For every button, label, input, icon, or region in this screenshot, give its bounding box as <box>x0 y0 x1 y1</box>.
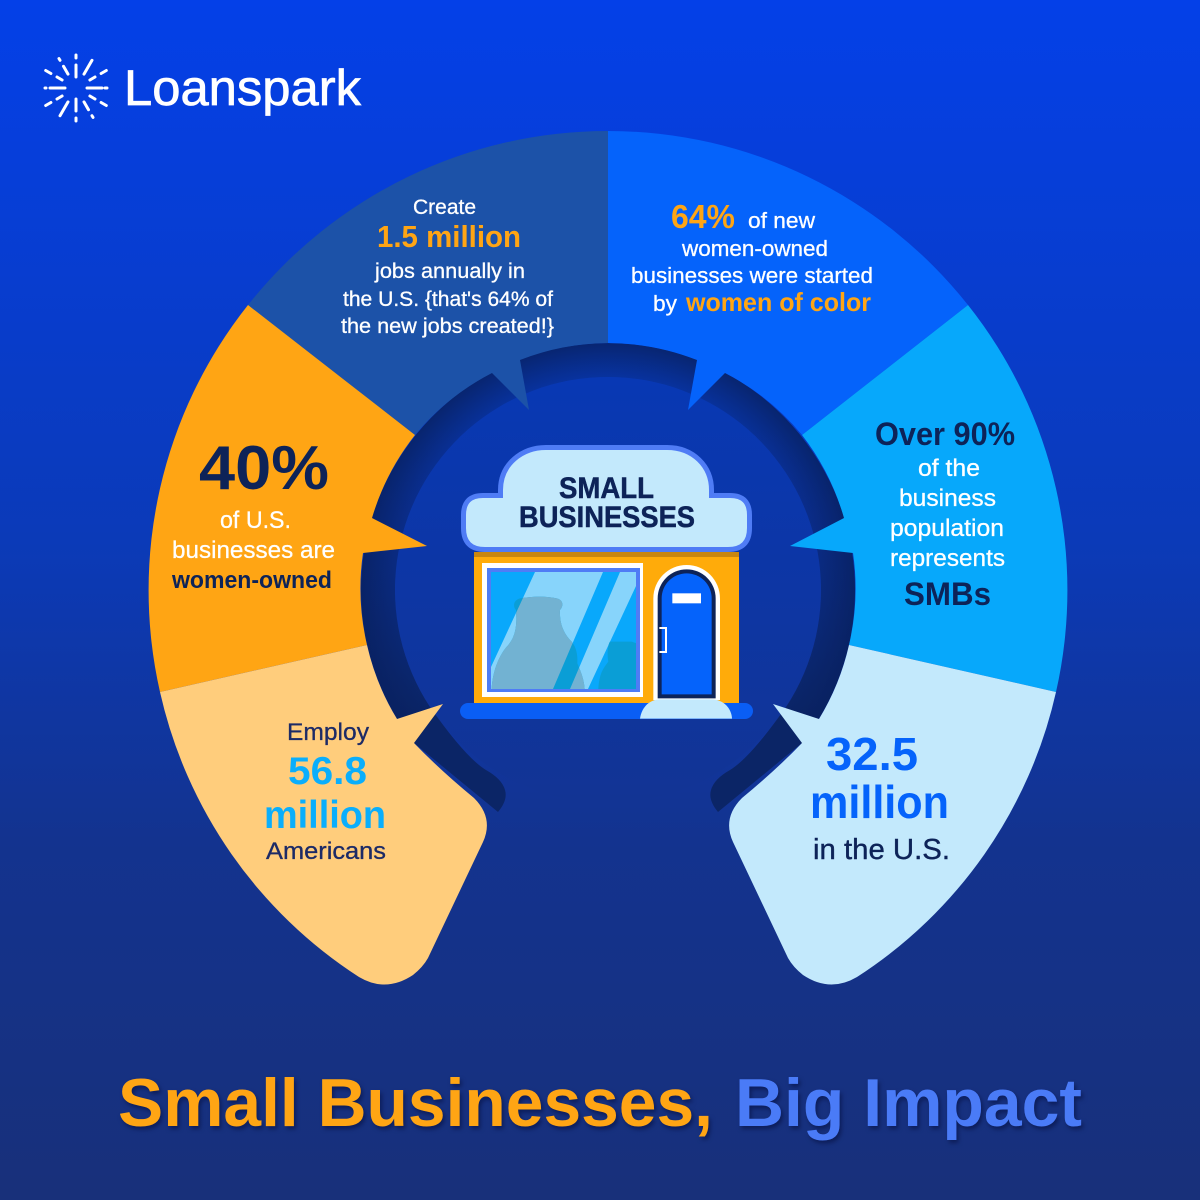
central disk <box>395 377 821 803</box>
panel: over 90% SMBs <box>790 305 1067 692</box>
panel: 64% women of color <box>608 131 968 435</box>
wall <box>474 552 739 703</box>
panel: 32.5 million in the U.S.: million <box>810 776 949 828</box>
panel: 64% women of color: of new <box>748 208 815 233</box>
panel: over 90% SMBs: Over 90% <box>875 416 1015 452</box>
title <box>118 1065 1082 1141</box>
door <box>653 565 720 700</box>
panel: 56.8 million Americans: Employ <box>287 719 369 746</box>
panel: over 90% SMBs: of the <box>918 455 980 482</box>
panel: 64% women of color: women of color <box>685 287 871 317</box>
title: Small Businesses, <box>118 1065 713 1141</box>
panel: over 90% SMBs: SMBs <box>904 576 991 612</box>
logo <box>45 55 362 121</box>
panel: over 90% SMBs: business <box>899 485 996 512</box>
panel: 56.8 million Americans: 56.8 <box>288 750 367 793</box>
sign <box>464 448 750 550</box>
panel: 64% women of color: 64% <box>671 198 735 235</box>
panel: 40% women-owned: of U.S. <box>220 507 291 534</box>
window <box>482 563 643 697</box>
panel: 40% women-owned <box>149 305 427 692</box>
icon: spark <box>45 55 107 121</box>
doorstep <box>640 699 732 719</box>
panel: over 90% SMBs: population <box>890 515 1004 542</box>
base <box>460 703 753 719</box>
panel: over 90% SMBs: represents <box>890 545 1005 572</box>
dark ring <box>361 343 855 812</box>
panel: 1.5 million jobs: the new jobs created!} <box>341 314 554 338</box>
panel: 64% women of color: women-owned <box>681 236 828 261</box>
panel: 1.5 million jobs: Create <box>413 195 476 219</box>
panel: 32.5 million in the U.S. <box>729 645 1056 985</box>
title: Big Impact <box>735 1065 1082 1141</box>
panel: 1.5 million jobs: 1.5 million <box>377 219 521 254</box>
panel: 1.5 million jobs: jobs annually in <box>374 259 525 283</box>
panel: 1.5 million jobs: the U.S. {that's 64% of <box>343 287 553 311</box>
panel: 56.8 million Americans <box>160 645 487 985</box>
panel: 1.5 million jobs <box>248 131 608 435</box>
panel: 40% women-owned: businesses are <box>172 537 335 564</box>
panel: 32.5 million in the U.S.: in the U.S. <box>813 834 950 866</box>
panel: 40% women-owned: 40% <box>199 434 329 503</box>
wordmark: Loanspark <box>124 60 362 116</box>
storefront <box>460 448 753 719</box>
panel: 56.8 million Americans: million <box>264 794 386 837</box>
panel: 32.5 million in the U.S.: 32.5 <box>826 728 918 780</box>
panel: 64% women of color: by <box>653 291 677 316</box>
sign: BUSINESSES <box>519 501 695 534</box>
panel: 64% women of color: businesses were started <box>631 263 873 288</box>
panel: 56.8 million Americans: Americans <box>266 838 386 865</box>
panel: 40% women-owned: women-owned <box>171 567 332 594</box>
sign: SMALL <box>559 472 654 505</box>
